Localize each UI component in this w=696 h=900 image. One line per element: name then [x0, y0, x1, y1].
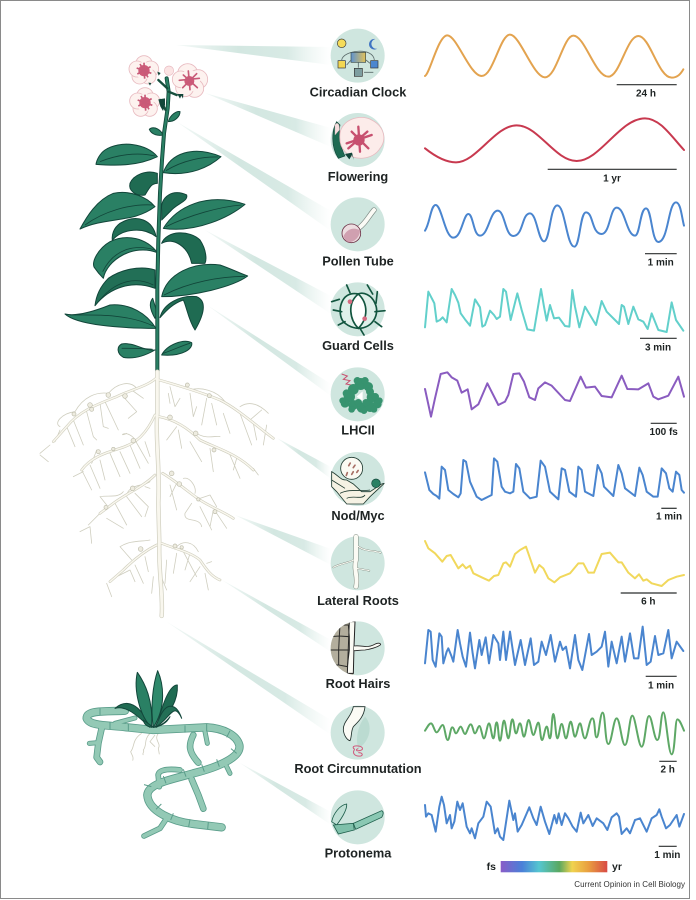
- scale bar: 3 min: [645, 343, 671, 354]
- illustration: moss protonema and gametophore: [87, 671, 240, 836]
- protonema filaments outline: [87, 711, 240, 836]
- protonema filaments fill: [87, 711, 240, 836]
- thick roots fill: [53, 372, 273, 616]
- oscillation trace: [425, 35, 683, 78]
- rhizoids: [131, 733, 159, 761]
- light rays connecting plant to panels: [167, 45, 331, 825]
- scale bar: [645, 254, 677, 269]
- stem: [157, 78, 169, 371]
- oscillation trace: [425, 541, 684, 586]
- icon: root hair cell: [327, 620, 385, 677]
- label: Flowering: [328, 169, 388, 184]
- leaves: [65, 112, 248, 358]
- flower: top left: [129, 56, 159, 84]
- panel row: Pollen Tube: [322, 197, 684, 269]
- scale bar: [659, 761, 677, 776]
- icon: circumnutating root tip: [331, 706, 385, 760]
- panel row: Root Hairs: [326, 620, 683, 691]
- scale bar: 1 yr: [603, 174, 621, 185]
- scale bar: 2 h: [660, 765, 675, 776]
- label: Pollen Tube: [322, 254, 394, 268]
- icon: light-harvesting complex: [331, 367, 385, 421]
- panel row: Protonema: [325, 790, 684, 861]
- scale bar: 24 h: [636, 89, 656, 100]
- oscillation trace: [425, 202, 684, 247]
- label: Root Circumnutation: [294, 761, 422, 776]
- icon: circadian clock network: [331, 29, 385, 83]
- label: Lateral Roots: [317, 593, 399, 608]
- thick roots outline: [53, 372, 273, 616]
- label: Protonema: [325, 846, 392, 861]
- scale bar: 6 h: [641, 597, 656, 608]
- pedicels: [158, 80, 177, 110]
- icon: nodule and mycorrhiza: [331, 452, 385, 506]
- legend: timescale colour bar: fs: [487, 861, 496, 873]
- icon: stomatal guard cells: [331, 282, 385, 336]
- panel row: Nod/Myc: [331, 452, 684, 523]
- leaf midribs: [70, 154, 245, 353]
- scale bar: [646, 676, 677, 691]
- illustration: root system: [40, 372, 273, 616]
- icon: protonema filament: [331, 790, 385, 844]
- oscillation trace: [425, 458, 684, 500]
- oscillation trace: [425, 797, 684, 840]
- scale bar: 1 min: [656, 511, 682, 522]
- panel row: Root Circumnutation: [294, 706, 684, 776]
- scale bar: 1 min: [648, 258, 674, 269]
- label: Nod/Myc: [331, 508, 385, 523]
- panel row: LHCII: [331, 367, 684, 438]
- flower: lower left: [130, 88, 160, 116]
- oscillation trace: [425, 118, 684, 162]
- icon: pollen grain and tube: [331, 197, 385, 251]
- sepals: [148, 72, 183, 111]
- scale bar: [617, 85, 677, 100]
- label: Guard Cells: [322, 338, 394, 353]
- illustration: flowering plant shoot: [65, 56, 248, 371]
- oscillation trace: [425, 627, 683, 670]
- fine rootlets: [40, 384, 268, 597]
- oscillation trace: [425, 289, 683, 332]
- flower: right: [172, 64, 208, 97]
- oscillation trace: [425, 712, 684, 754]
- flower bud: [164, 66, 174, 75]
- scale bar: 1 min: [654, 850, 680, 861]
- nodules: [72, 383, 217, 551]
- cell walls: [100, 708, 237, 829]
- panel row: Lateral Roots: [317, 536, 684, 608]
- gametophore leaves: [115, 671, 182, 727]
- oscillation trace: [425, 372, 684, 417]
- scale bar: 1 min: [648, 680, 674, 691]
- scale bar: [548, 169, 677, 185]
- panel row: Circadian Clock: [310, 29, 683, 100]
- label: LHCII: [341, 423, 375, 438]
- panel row: Flowering: [328, 113, 684, 185]
- label: Circadian Clock: [310, 84, 407, 100]
- scale bar: [640, 338, 677, 354]
- journal credit: Current Opinion in Cell Biology: [574, 880, 685, 889]
- legend: timescale colour bar: [487, 861, 622, 873]
- scale bar: 100 fs: [650, 427, 678, 438]
- scale bar: [621, 593, 677, 608]
- label: Root Hairs: [326, 676, 390, 691]
- icon: flower: [331, 113, 385, 167]
- panel row: Guard Cells: [322, 282, 683, 354]
- legend: timescale colour bar: yr: [612, 861, 622, 873]
- icon: lateral roots: [331, 536, 385, 590]
